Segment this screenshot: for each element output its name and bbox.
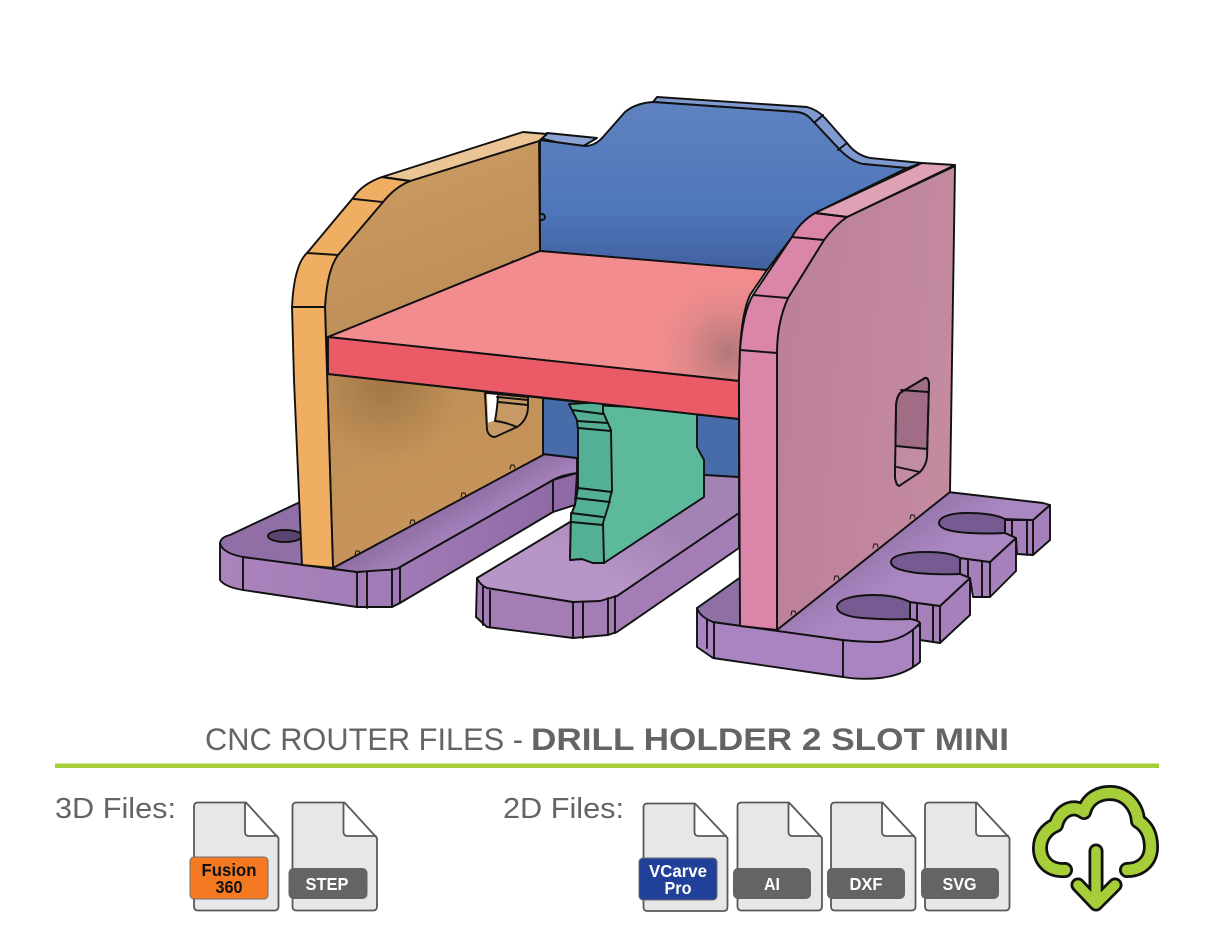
file icon: DXF: DXF — [850, 874, 883, 894]
left panel: orange — [292, 132, 547, 568]
slot in orange panel — [485, 393, 528, 437]
base: left foot — [220, 454, 577, 608]
base: middle foot — [476, 470, 739, 638]
file icon: AI — [733, 802, 822, 910]
title: product name: DRILL HOLDER 2 SLOT MINI — [531, 721, 1009, 757]
file icon: AI: AI — [764, 874, 780, 894]
file icon: STEP: STEP — [306, 874, 349, 894]
icon: cloud download — [1040, 793, 1151, 904]
illustration: drill holder 3D model — [220, 97, 1050, 679]
file icon: STEP — [288, 802, 377, 910]
shelf: red — [328, 251, 767, 419]
file icon: SVG — [921, 802, 1010, 910]
file icon: VCarve Pro — [639, 804, 728, 911]
back panel: blue — [539, 97, 922, 477]
bracket: green — [569, 402, 704, 563]
green divider — [55, 764, 1159, 768]
file icon: Fusion 360: 360 — [216, 877, 243, 897]
right panel: pink — [739, 163, 955, 630]
file icon: Fusion 360: Fusion — [202, 860, 256, 880]
heading: 2D files: 2D Files: — [503, 793, 624, 825]
title: CNC ROUTER FILES - — [205, 721, 523, 757]
holes — [837, 595, 910, 619]
window in pink panel — [895, 378, 929, 486]
base: right foot with three holes — [697, 492, 1050, 679]
file icon: Fusion 360 — [190, 802, 278, 910]
file icon: SVG: SVG — [942, 874, 976, 894]
file icon: VCarve Pro: VCarve — [649, 861, 707, 881]
heading: 3D files: 3D Files: — [55, 793, 176, 825]
file icon: DXF — [827, 802, 916, 910]
finger fronts — [910, 505, 1050, 643]
file icon: VCarve Pro: Pro — [664, 878, 692, 898]
